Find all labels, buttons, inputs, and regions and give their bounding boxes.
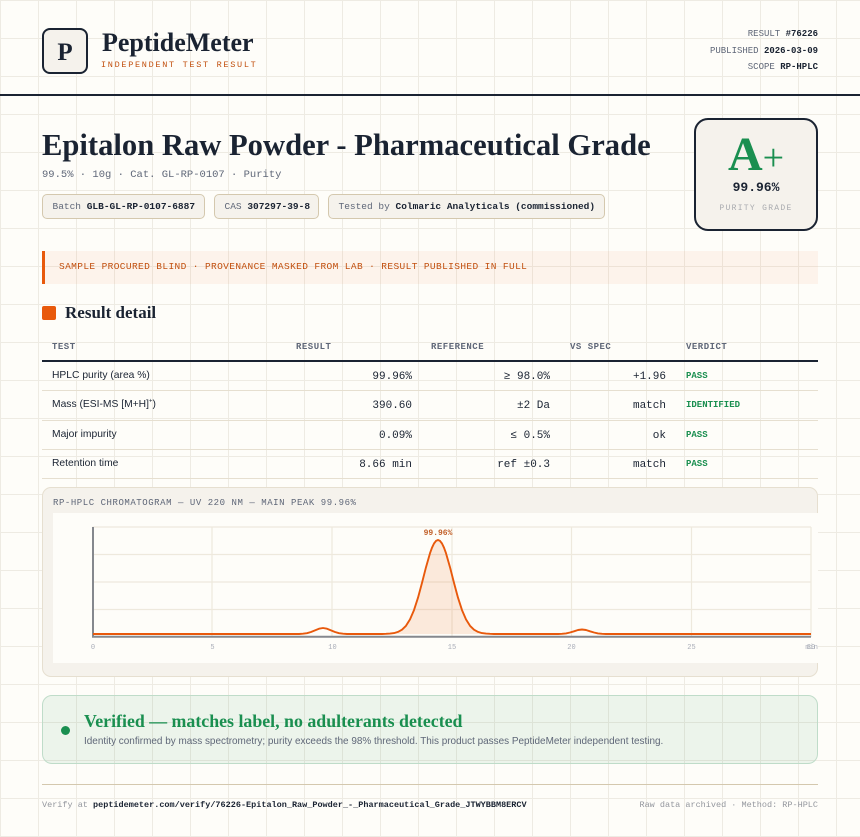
verification link: Verify at peptidemeter.com/verify/76226-Epitalon_Raw_Powder_-_Pharmaceutical_Grade_JTWYBBM8ERCV	[42, 800, 527, 810]
row: mass: IDENTIFIED	[686, 400, 740, 410]
result number: RESULT #76226	[748, 29, 818, 39]
published date: PUBLISHED 2026-03-09	[710, 46, 818, 56]
row: mass: match	[633, 400, 666, 412]
header rule	[0, 94, 860, 96]
chip: lab	[328, 194, 605, 219]
x axis ticks: 5	[210, 644, 215, 652]
section heading: Result detail	[65, 303, 156, 322]
result meta	[710, 29, 818, 72]
brand tagline: INDEPENDENT TEST RESULT	[101, 60, 257, 70]
chip: lab: Tested by Colmaric Analyticals (commissioned)	[338, 201, 595, 212]
chart plot area	[53, 513, 818, 663]
x axis ticks: 15	[448, 644, 456, 652]
row: major impurity: 0.09%	[379, 430, 412, 442]
chromatogram panel	[42, 487, 818, 677]
brand name: PeptideMeter	[102, 28, 254, 57]
header	[0, 28, 860, 96]
scope: SCOPE RP-HPLC	[748, 62, 818, 72]
row: major impurity: ok	[653, 430, 666, 442]
product subtitle: 99.5% · 10g · Cat. GL-RP-0107 · Purity	[42, 169, 281, 181]
row: retention time: match	[633, 459, 666, 471]
row: retention time: Retention time	[52, 458, 118, 469]
row: retention time: PASS	[686, 459, 708, 469]
row: retention time: ref ±0.3	[497, 459, 550, 471]
row: mass: Mass (ESI-MS [M+H]+)	[52, 399, 156, 410]
row: hplc purity: PASS	[686, 371, 708, 381]
x axis ticks: 25	[687, 644, 696, 652]
row: hplc purity: +1.96	[633, 371, 666, 383]
chart title: RP-HPLC CHROMATOGRAM — UV 220 NM — MAIN PEAK 99.96%	[53, 498, 356, 508]
x axis ticks	[91, 644, 818, 652]
peak fill	[382, 540, 494, 634]
row: major impurity: PASS	[686, 430, 708, 440]
peak label: 99.96%	[424, 529, 453, 538]
purity value: 99.96%	[733, 180, 779, 195]
row: retention time	[52, 458, 708, 471]
row: hplc purity	[52, 370, 708, 383]
row: hplc purity: HPLC purity (area %)	[52, 370, 150, 381]
footer	[42, 784, 818, 814]
row: mass: 390.60	[372, 400, 412, 412]
grade label: PURITY GRADE	[719, 204, 793, 213]
logo mark	[42, 28, 88, 74]
row: retention time: 8.66 min	[359, 459, 412, 471]
callout heading: Verified — matches label, no adulterants detected	[84, 711, 462, 731]
grade card	[694, 118, 818, 231]
logo mark: P	[57, 39, 73, 66]
column header: vs spec: VS SPEC	[570, 342, 611, 352]
provenance notice	[42, 251, 818, 284]
verified callout	[42, 695, 818, 764]
x axis ticks: 30	[807, 644, 815, 652]
grade letter: A+	[728, 128, 784, 181]
chip: cas	[214, 194, 319, 219]
status dot	[61, 726, 70, 735]
product title: Epitalon Raw Powder - Pharmaceutical Grade	[42, 128, 651, 162]
row: major impurity	[52, 429, 708, 442]
chip: batch: Batch GLB-GL-RP-0107-6887	[52, 201, 195, 212]
column header: result: RESULT	[296, 342, 331, 352]
chip: cas: CAS 307297-39-8	[224, 201, 310, 212]
column header: reference: REFERENCE	[431, 342, 484, 352]
row: major impurity: Major impurity	[52, 429, 117, 440]
column header: test: TEST	[52, 342, 76, 352]
section icon	[42, 306, 56, 320]
x axis ticks: 10	[328, 644, 337, 652]
row: hplc purity: 99.96%	[372, 371, 412, 383]
row: major impurity: ≤ 0.5%	[510, 430, 550, 442]
chromatogram trace	[93, 540, 811, 634]
axes	[93, 527, 811, 637]
notice text: SAMPLE PROCURED BLIND · PROVENANCE MASKED FROM LAB · RESULT PUBLISHED IN FULL	[59, 261, 527, 272]
chip: batch	[42, 194, 205, 219]
callout body: Identity confirmed by mass spectrometry; purity exceeds the 98% threshold. This product passes PeptideMeter independent testing.	[84, 736, 663, 747]
x axis ticks: 0	[91, 644, 95, 652]
x axis ticks: 20	[567, 644, 576, 652]
archive note: Raw data archived · Method: RP-HPLC	[639, 800, 818, 810]
x axis ticks: min	[805, 644, 818, 652]
row: hplc purity: ≥ 98.0%	[504, 371, 550, 383]
row: mass	[52, 398, 740, 412]
column header: verdict: VERDICT	[686, 342, 727, 352]
results table	[42, 342, 818, 479]
row: mass: ±2 Da	[517, 400, 550, 412]
